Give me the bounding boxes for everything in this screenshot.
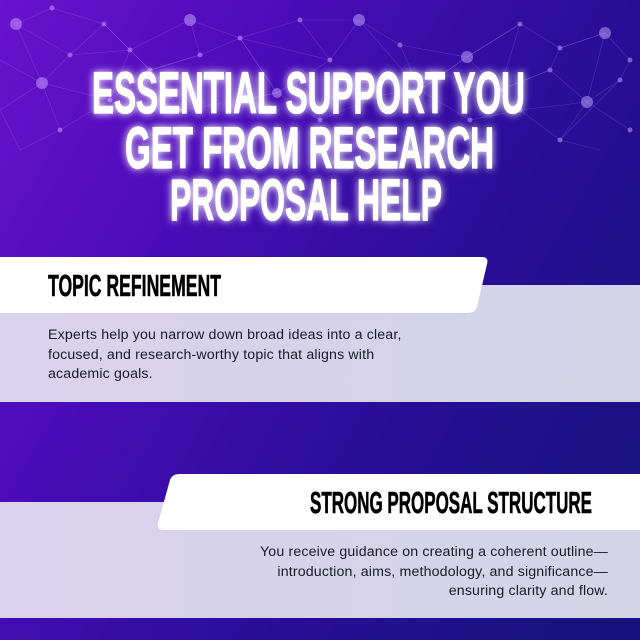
light band xyxy=(0,285,640,402)
body text xyxy=(260,544,608,599)
panel: topic refinement xyxy=(0,257,640,402)
body text: You receive guidance on creating a coherent outline— xyxy=(260,544,608,560)
body text: focused, and research-worthy topic that aligns with xyxy=(48,346,374,362)
background network pattern xyxy=(0,6,632,150)
body text: Experts help you narrow down broad ideas into a clear, xyxy=(48,327,402,343)
title xyxy=(87,61,530,230)
panel: strong proposal structure xyxy=(0,474,640,618)
body text: academic goals. xyxy=(48,366,153,382)
header bar xyxy=(0,257,488,313)
header bar: TOPIC REFINEMENT xyxy=(48,268,221,303)
body text: introduction, aims, methodology, and significance— xyxy=(277,564,608,580)
body text xyxy=(48,327,402,382)
light band xyxy=(0,502,640,618)
header bar xyxy=(158,474,640,530)
body text: ensuring clarity and flow. xyxy=(449,583,608,599)
